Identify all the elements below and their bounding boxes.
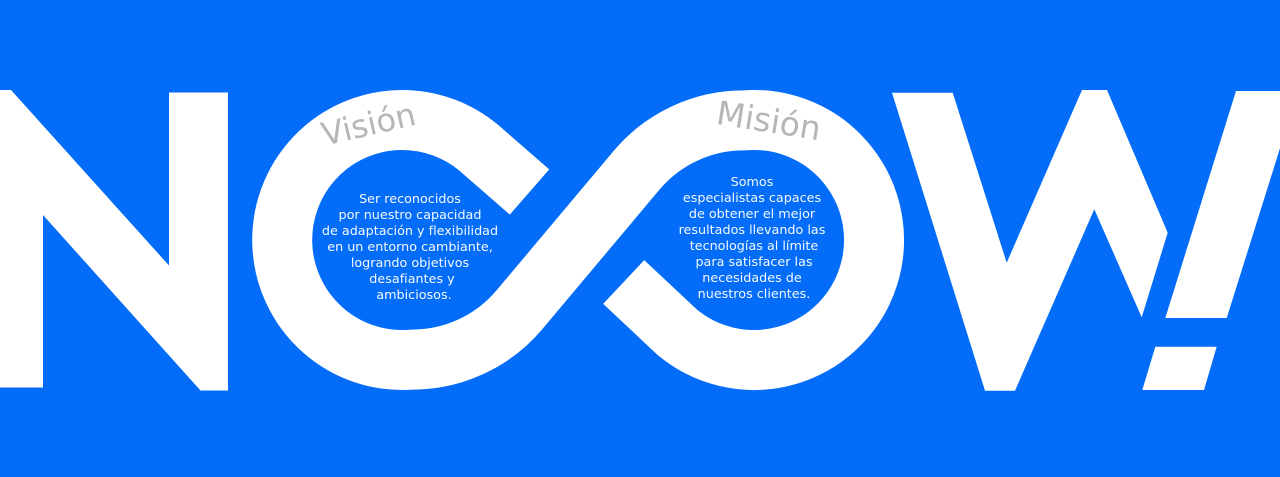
text block: vision statement: en un entorno cambiante,: [327, 240, 493, 255]
text block: vision statement: ambiciosos.: [376, 288, 452, 303]
infinity symbol forming letter O: [282, 120, 874, 360]
text block: vision statement: [322, 192, 498, 303]
exclamation mark: [1142, 91, 1280, 390]
heading: Misión: Misión: [714, 93, 824, 148]
text block: vision statement: por nuestro capacidad: [339, 208, 481, 223]
letter W: [892, 90, 1168, 391]
text block: mission statement: especialistas capaces: [683, 191, 821, 206]
text block: mission statement: [679, 175, 826, 302]
text block: mission statement: nuestros clientes.: [698, 287, 810, 302]
text block: vision statement: desafiantes y: [369, 272, 455, 287]
text block: mission statement: Somos: [731, 175, 774, 190]
text block: mission statement: necesidades de: [702, 271, 802, 286]
text block: mission statement: de obtener el mejor: [689, 207, 816, 222]
heading: Visión: Visión: [318, 95, 419, 154]
text block: vision statement: Ser reconocidos: [359, 192, 461, 207]
text block: mission statement: resultados llevando las: [679, 223, 826, 238]
text block: vision statement: logrando objetivos: [351, 256, 470, 271]
text block: mission statement: para satisfacer las: [695, 255, 813, 270]
text block: mission statement: tecnologías al límite: [690, 239, 818, 254]
letter N: [0, 90, 228, 390]
text block: vision statement: de adaptación y flexibilidad: [322, 224, 498, 239]
